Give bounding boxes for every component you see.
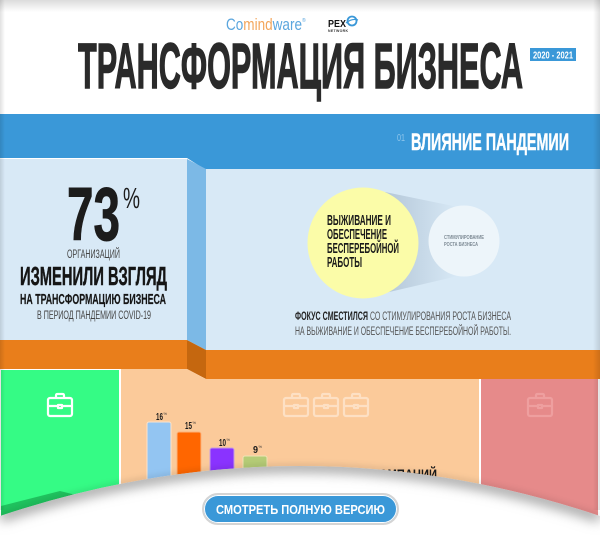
panel: focus shift (206, 169, 600, 350)
icon: briefcases (284, 394, 368, 416)
icon: briefcase (528, 394, 552, 416)
bar: 16 percent (147, 411, 171, 492)
focus caption: ФОКУС СМЕСТИЛСЯ (295, 311, 368, 323)
button: view full version: СМОТРЕТЬ ПОЛНУЮ ВЕРСИЮ (216, 502, 385, 517)
bar chart (147, 411, 267, 492)
date badge: 2020 - 2021 (533, 50, 573, 62)
big number: 73 (67, 172, 120, 256)
light circle: business growth (428, 206, 500, 276)
transformation line: НА ТРАНСФОРМАЦИЮ БИЗНЕСА (20, 292, 166, 308)
date badge (530, 48, 576, 62)
panel: 73 percent statistic (0, 159, 187, 340)
pandemic period line: В ПЕРИОД ПАНДЕМИИ COVID-19 (37, 310, 151, 322)
organisations label: ОРГАНИЗАЦИЙ (67, 248, 120, 261)
bar: 16 percent: % (164, 411, 168, 416)
logo: PEX Network: NETWORK (328, 29, 348, 33)
yellow circle: survival: БЕСПЕРЕБОЙНОЙ (327, 239, 399, 257)
yellow circle: survival: ВЫЖИВАНИЕ И (327, 213, 391, 229)
logo: PEX Network (328, 16, 358, 33)
orange ribbon (0, 340, 600, 379)
section number: 01 (397, 133, 405, 144)
bar: 9 percent (243, 444, 267, 492)
logo: Comindware: Comindware (226, 16, 302, 34)
yellow circle: survival (308, 188, 418, 298)
button: view full version (203, 494, 398, 524)
bottom white curve (0, 466, 600, 537)
bar: 15 percent: 15 (185, 421, 192, 432)
bar: 16 percent: 16 (156, 412, 163, 423)
yellow circle: survival: РАБОТЫ (327, 255, 362, 271)
icon: briefcase (48, 394, 72, 416)
panel: peach column with bar chart (121, 369, 479, 500)
logo: Comindware: ® (302, 17, 306, 24)
bar: 10 percent: 10 (219, 438, 226, 449)
section header band (0, 114, 600, 170)
focus caption: СО СТИМУЛИРОВАНИЯ РОСТА БИЗНЕСА (370, 311, 511, 323)
bar: 15 percent: % (192, 420, 196, 425)
bar: 15 percent (177, 420, 201, 492)
partly hidden caption: КОМПАНИЙ (372, 465, 437, 482)
cone between circles (385, 192, 458, 293)
changed view heading: ИЗМЕНИЛИ ВЗГЛЯД (20, 261, 167, 291)
percent sign: % (123, 183, 140, 215)
light circle: business growth: РОСТА БИЗНЕСА (444, 242, 478, 248)
bar: 10 percent (210, 437, 234, 492)
panel: pink column (481, 379, 598, 530)
dark green wedge (1, 491, 76, 517)
yellow circle: survival: ОБЕСПЕЧЕНИЕ (327, 227, 387, 243)
logo: PEX Network: PEX (328, 19, 346, 30)
panel: green column (1, 370, 119, 530)
fold side: light blue (187, 159, 206, 350)
bar: 10 percent: % (226, 437, 230, 442)
bar: 9 percent: % (258, 444, 262, 449)
focus caption (295, 311, 511, 338)
light circle: business growth: СТИМУЛИРОВАНИЕ (444, 235, 484, 241)
bar: 9 percent: 9 (253, 445, 258, 456)
